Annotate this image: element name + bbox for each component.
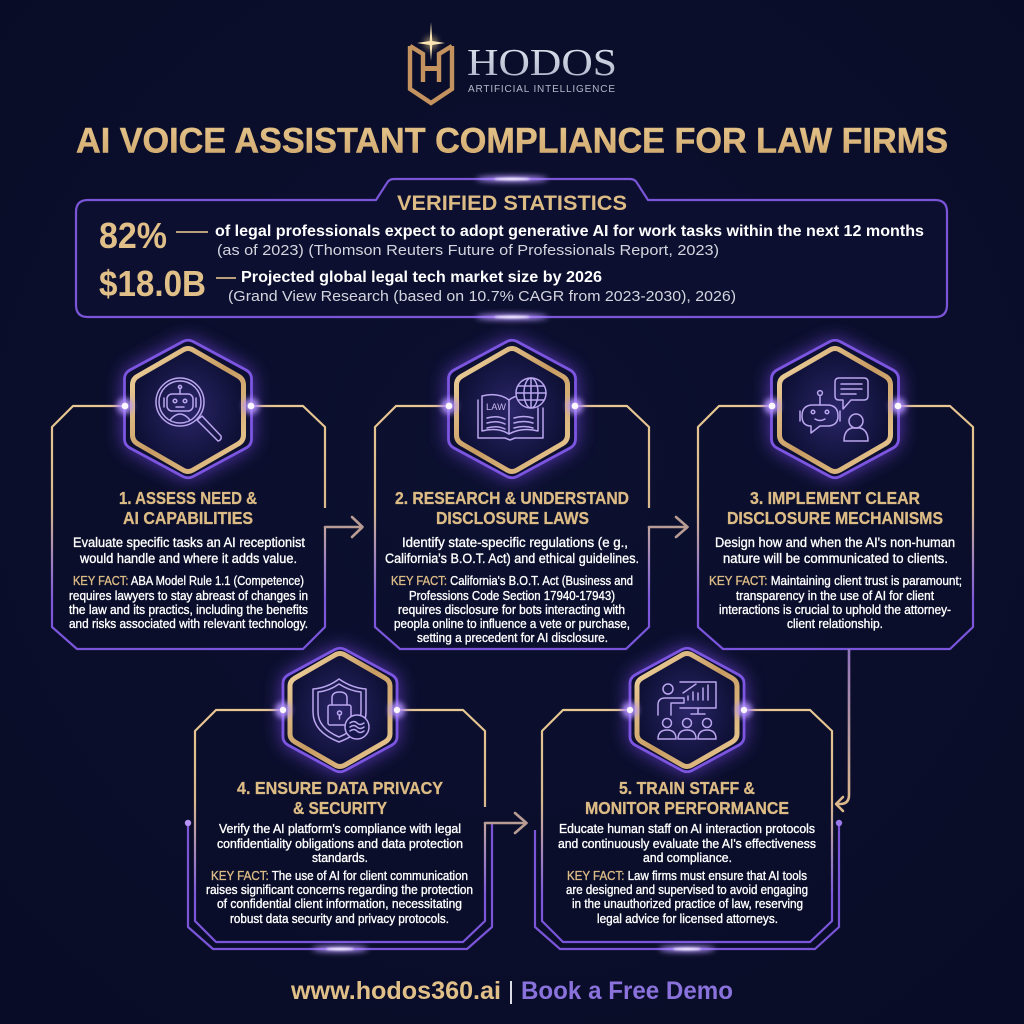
step heading: 2. RESEARCH & UNDERSTAND <box>395 488 629 508</box>
key fact: KEY FACT: ABA Model Rule 1.1 (Competence) <box>73 573 304 588</box>
key fact: setting a precedent for AI disclosure. <box>417 630 608 645</box>
hexagon badge <box>117 340 259 478</box>
step description: Design how and when the AI's non-human <box>715 535 955 550</box>
footer call to action <box>290 977 733 1005</box>
step description: Evaluate specific tasks an AI receptionist <box>73 535 305 550</box>
step description <box>385 535 639 566</box>
hexagon badge <box>622 648 752 772</box>
key fact: interactions is crucial to uphold the attorney- <box>719 602 951 617</box>
arrow to step 5 <box>485 813 526 833</box>
panel: verified statistics <box>76 176 947 320</box>
step heading: & SECURITY <box>293 798 387 818</box>
icon: shield with lock <box>313 679 369 742</box>
stat: $18.0B: $18.0B <box>99 263 206 304</box>
step heading <box>395 488 629 528</box>
arrow to step 3 <box>649 517 688 537</box>
step heading: DISCLOSURE MECHANISMS <box>727 508 943 528</box>
step description: confidentiality obligations and data protection <box>217 836 463 851</box>
title: AI VOICE ASSISTANT COMPLIANCE FOR LAW FIRMS <box>76 122 948 160</box>
stat: 82% <box>99 215 924 259</box>
step heading <box>237 778 443 818</box>
stat: $18.0B: Projected global legal tech market size by 2026 <box>241 269 602 286</box>
arrow to step 2 <box>325 517 362 537</box>
icon: law book and globe: LAW <box>486 402 507 412</box>
key fact: requires disclosure for bots interacting with <box>398 602 625 617</box>
card border <box>698 406 973 649</box>
key fact: KEY FACT: Maintaining client trust is paramount; <box>709 573 962 588</box>
step heading: MONITOR PERFORMANCE <box>585 798 789 818</box>
panel: step 1 <box>52 340 362 649</box>
key fact: robust data security and privacy protocols. <box>230 911 449 926</box>
step description <box>558 821 816 865</box>
icon: law book and globe <box>478 378 546 440</box>
icon: trainer with chart and audience <box>658 682 716 739</box>
key fact <box>69 573 308 631</box>
key fact: peopla online to influence a vete or purchase, <box>394 616 630 631</box>
logo star <box>417 22 445 61</box>
key fact: KEY FACT: The use of AI for client communication <box>211 868 468 883</box>
stat: 82%: (as of 2023) (Thomson Reuters Future of Professionals Report, 2023) <box>217 242 719 259</box>
step heading: 3. IMPLEMENT CLEAR <box>750 488 920 508</box>
step description: and continuously evaluate the AI's effectiveness <box>558 836 816 851</box>
key fact: of confidential client information, necessitating <box>217 896 462 911</box>
step description: California's B.O.T. Act) and ethical guidelines. <box>385 551 639 566</box>
footer call to action: | <box>508 977 514 1005</box>
step description: would handle and where it adds value. <box>79 551 297 566</box>
logo <box>410 22 617 103</box>
key fact: KEY FACT: California's B.O.T. Act (Business and <box>391 573 633 588</box>
step heading <box>727 488 943 528</box>
key fact: requires lawyers to stay abreast of changes in <box>69 588 308 603</box>
step description: Verify the AI platform's compliance with legal <box>219 821 461 836</box>
hexagon badge <box>764 340 906 478</box>
step heading: 4. ENSURE DATA PRIVACY <box>237 778 443 798</box>
logo wordmark: HODOS <box>467 42 617 84</box>
stats heading: VERIFIED STATISTICS <box>397 192 627 215</box>
step description: Identify state-specific regulations (e g., <box>402 535 628 550</box>
card border <box>195 710 485 942</box>
arrow: step 3 to step 5 <box>836 649 849 811</box>
footer call to action: Book a Free Demo <box>521 977 733 1005</box>
stat: $18.0B: (Grand View Research (based on 10.7% CAGR from 2023-2030), 2026) <box>228 288 736 305</box>
card border <box>542 710 832 942</box>
step description: nature will be communicated to clients. <box>723 551 948 566</box>
key fact: in the unauthorized practice of law, reserving <box>572 896 803 911</box>
step description: standards. <box>312 850 368 865</box>
stats frame <box>76 179 947 317</box>
stat: 82%: of legal professionals expect to adopt generative AI for work tasks within the next 12 months <box>215 223 924 240</box>
step description: and compliance. <box>643 850 732 865</box>
step heading: 5. TRAIN STAFF & <box>619 778 755 798</box>
footer call to action: www.hodos360.ai <box>290 977 501 1005</box>
step description: Educate human staff on AI interaction protocols <box>559 821 815 836</box>
key fact <box>566 868 808 926</box>
outer frame line <box>535 823 839 949</box>
key fact <box>709 573 962 631</box>
step heading: 1. ASSESS NEED & <box>119 488 257 508</box>
step description <box>73 535 305 566</box>
logo tagline: ARTIFICIAL INTELLIGENCE <box>468 84 615 95</box>
icon: robot, chat bubble and person <box>800 378 868 441</box>
key fact: KEY FACT: Law firms must ensure that AI tools <box>567 868 807 883</box>
key fact: are designed and supervised to avoid engaging <box>566 882 808 897</box>
stat: $18.0B <box>99 263 736 305</box>
step heading: DISCLOSURE LAWS <box>436 508 589 528</box>
step heading <box>119 488 257 528</box>
key fact <box>206 868 473 926</box>
panel: step 5 <box>535 648 842 952</box>
key fact: Professions Code Section 17940-17943) <box>409 588 615 603</box>
card border <box>375 406 649 649</box>
panel: step 4 <box>185 648 527 952</box>
icon: robot under magnifying glass <box>156 378 221 441</box>
key fact: legal advice for licensed attorneys. <box>597 911 778 926</box>
step heading: AI CAPABILITIES <box>123 508 253 528</box>
stat: 82%: 82% <box>99 215 167 256</box>
logo shield <box>410 46 452 103</box>
panel: step 2 <box>375 340 688 649</box>
key fact: transparency in the use of AI for client <box>736 588 934 603</box>
key fact <box>391 573 633 645</box>
card border <box>52 406 325 649</box>
outer frame line <box>188 823 492 949</box>
key fact: raises significant concerns regarding the protection <box>206 882 473 897</box>
step description <box>715 535 955 566</box>
step description <box>217 821 463 865</box>
hexagon badge <box>441 340 583 478</box>
key fact: and risks associated with relevant technology. <box>69 616 308 631</box>
hexagon badge <box>275 648 405 772</box>
key fact: the law and its practics, including the benefits <box>69 602 308 617</box>
key fact: client relationship. <box>787 616 883 631</box>
step heading <box>585 778 789 818</box>
panel: step 3 <box>698 340 973 649</box>
